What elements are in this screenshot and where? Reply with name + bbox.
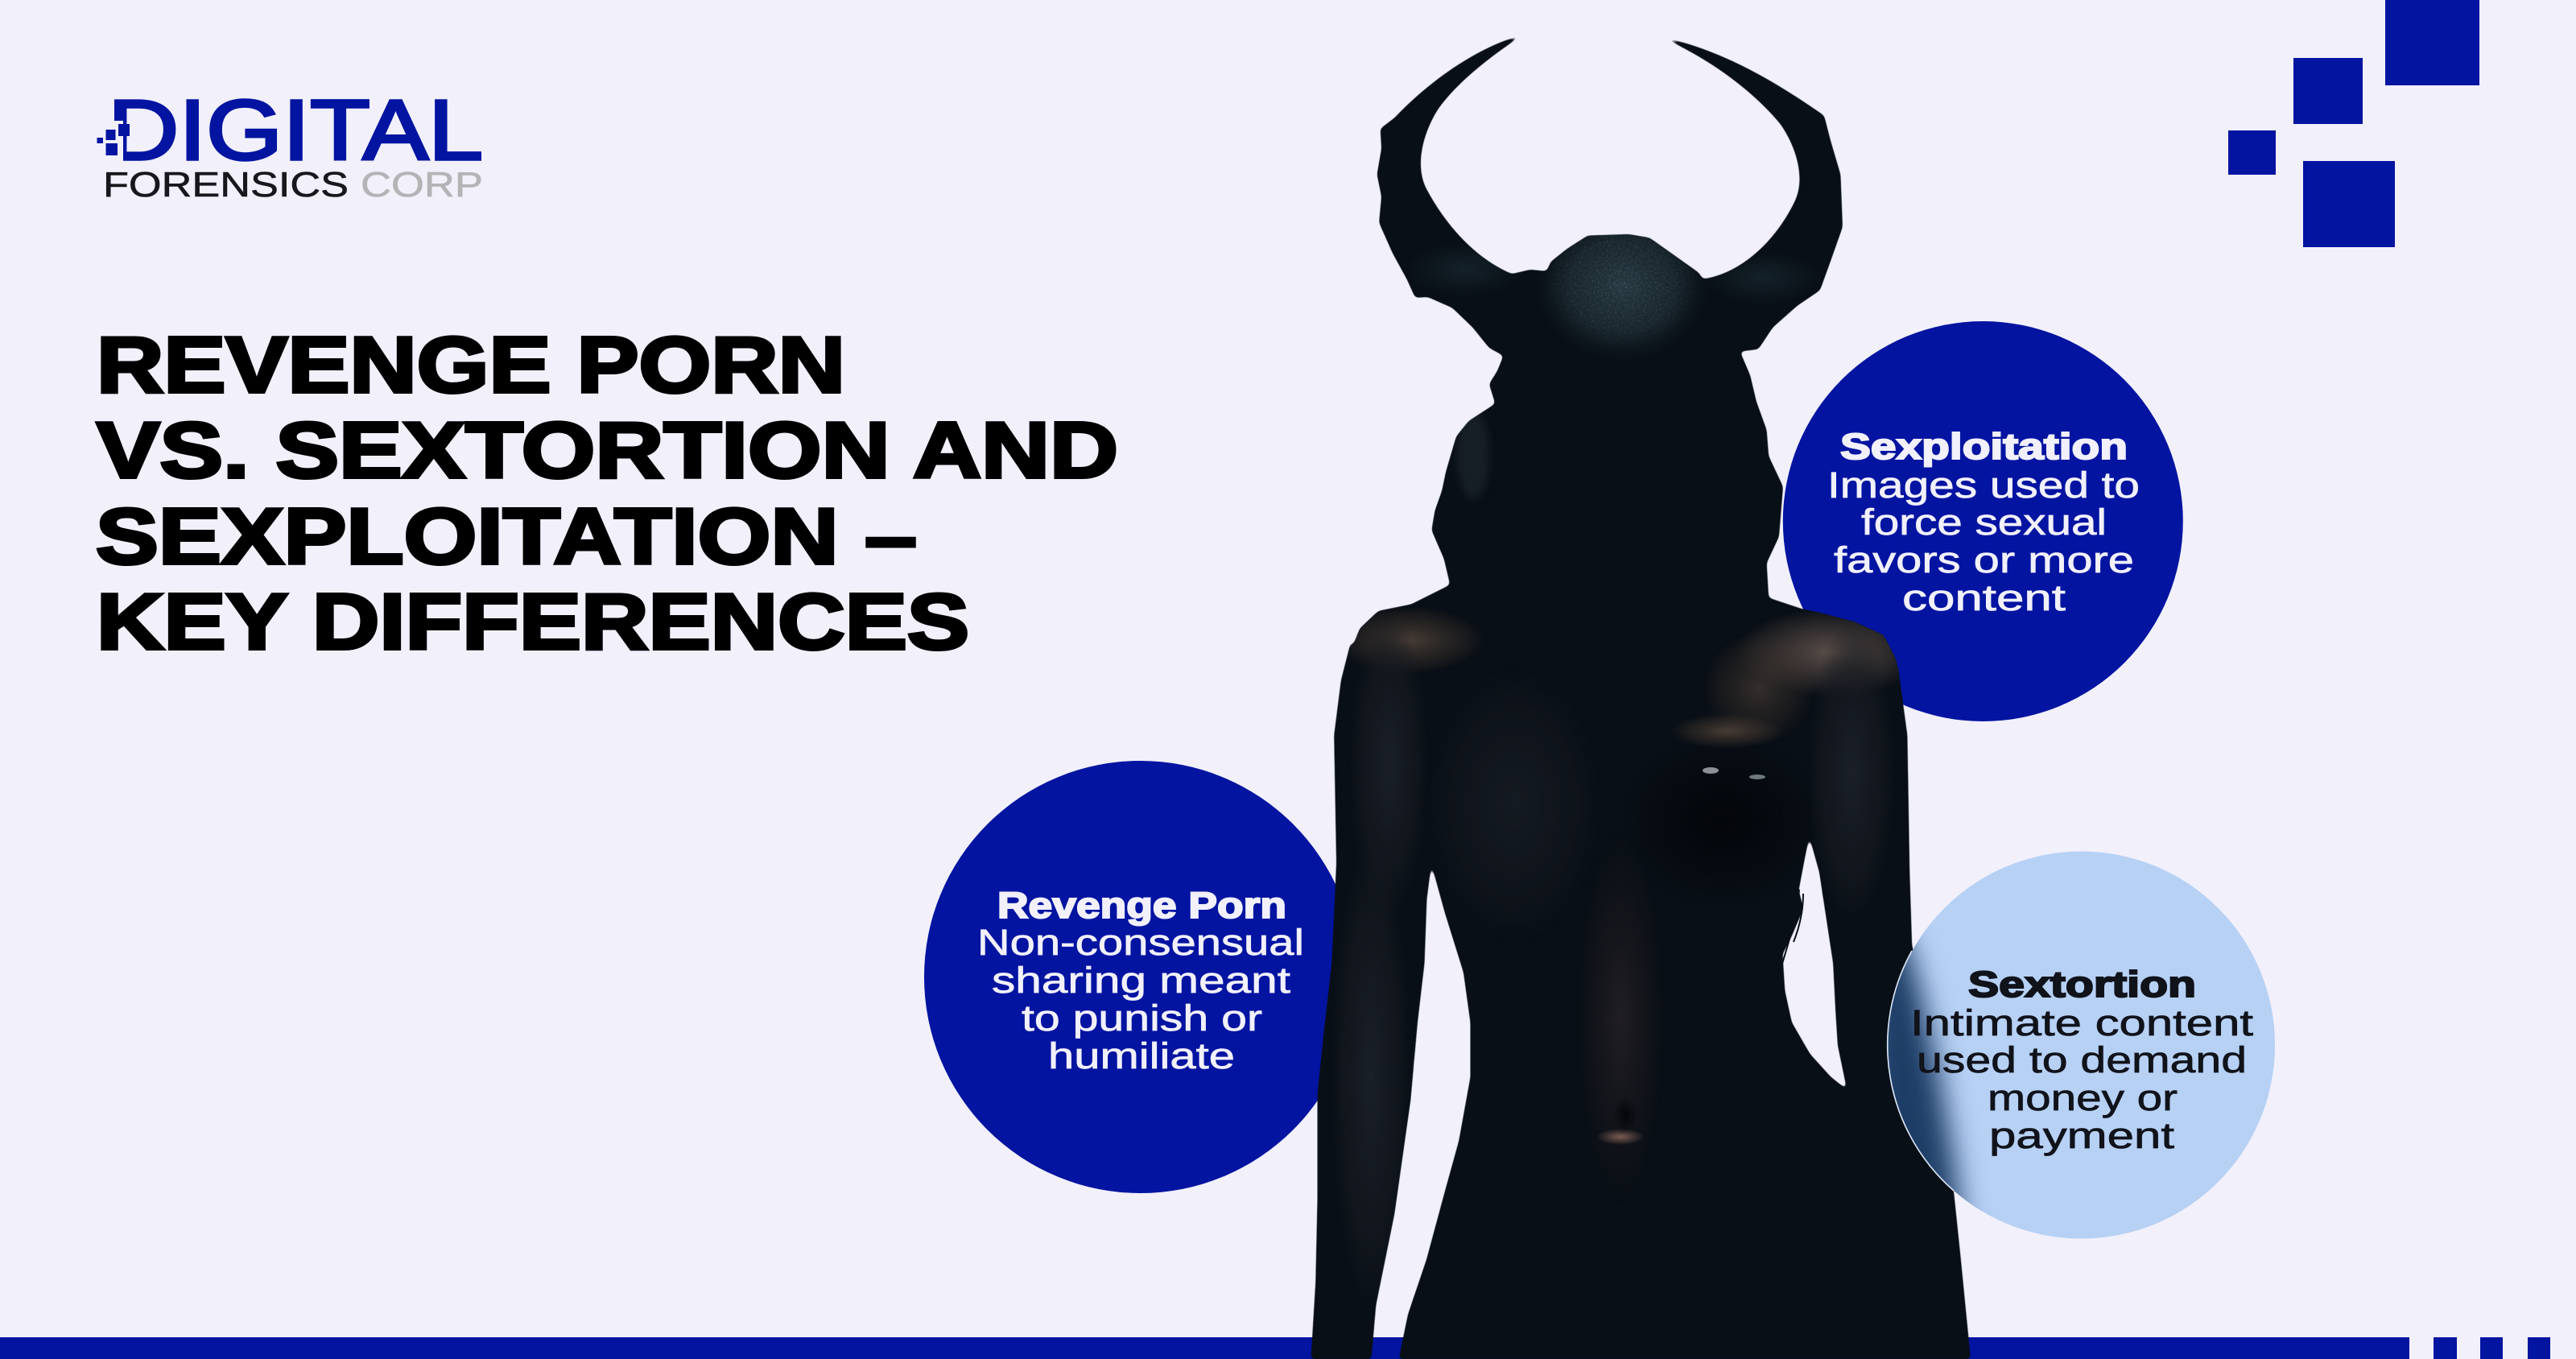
- panel: Sexploitation circle: Sexploitation: [1840, 426, 2128, 467]
- panel: Revenge Porn circle: Revenge Porn: [997, 885, 1286, 926]
- silhouette figure with horns: [1311, 35, 1971, 1359]
- panel: Sexploitation circle: force sexual: [1861, 502, 2107, 543]
- panel: Sextortion circle: Intimate content: [1910, 1002, 2254, 1043]
- panel: Sexploitation circle: content: [1902, 577, 2066, 618]
- panel: Revenge Porn circle: humiliate: [1048, 1035, 1235, 1076]
- title: KEY DIFFERENCES: [97, 577, 969, 666]
- panel: Sextortion circle: payment: [1989, 1115, 2175, 1156]
- panel: Sexploitation circle: favors or more: [1834, 539, 2134, 580]
- figure: base silhouette: [1311, 35, 1971, 1359]
- panel: Sexploitation circle: [1783, 321, 2183, 721]
- panel: Sexploitation circle: Images used to: [1827, 465, 2140, 506]
- panel: Sextortion circle: [1868, 852, 2275, 1240]
- figure: waist hair wisps: [1781, 890, 1803, 966]
- logo: Digital Forensics Corp: CORP: [361, 165, 483, 204]
- panel: Sextortion circle: used to demand: [1917, 1039, 2247, 1080]
- decorative squares top right: [2228, 0, 2479, 247]
- panel: Revenge Porn circle: [924, 761, 1356, 1193]
- panel: Revenge Porn circle: sharing meant: [992, 960, 1291, 1001]
- logo: Digital Forensics Corp: FORENSICS: [103, 165, 349, 204]
- title: [96, 320, 1118, 666]
- logo: Digital Forensics Corp: DIGITAL: [108, 83, 483, 178]
- title: REVENGE PORN: [97, 320, 845, 409]
- title: SEXPLOITATION –: [96, 492, 917, 580]
- panel: Sextortion circle: money or: [1988, 1077, 2178, 1118]
- logo: Digital Forensics Corp: [97, 83, 483, 204]
- panel: Revenge Porn circle: to punish or: [1022, 998, 1262, 1039]
- panel: Revenge Porn circle: Non-consensual: [977, 922, 1304, 963]
- bottom bar: [0, 1337, 2550, 1359]
- title: VS. SEXTORTION AND: [97, 406, 1118, 494]
- figure: head, horn and skin shading: [1343, 234, 1899, 1269]
- panel: Sextortion circle: Sextortion: [1968, 964, 2196, 1005]
